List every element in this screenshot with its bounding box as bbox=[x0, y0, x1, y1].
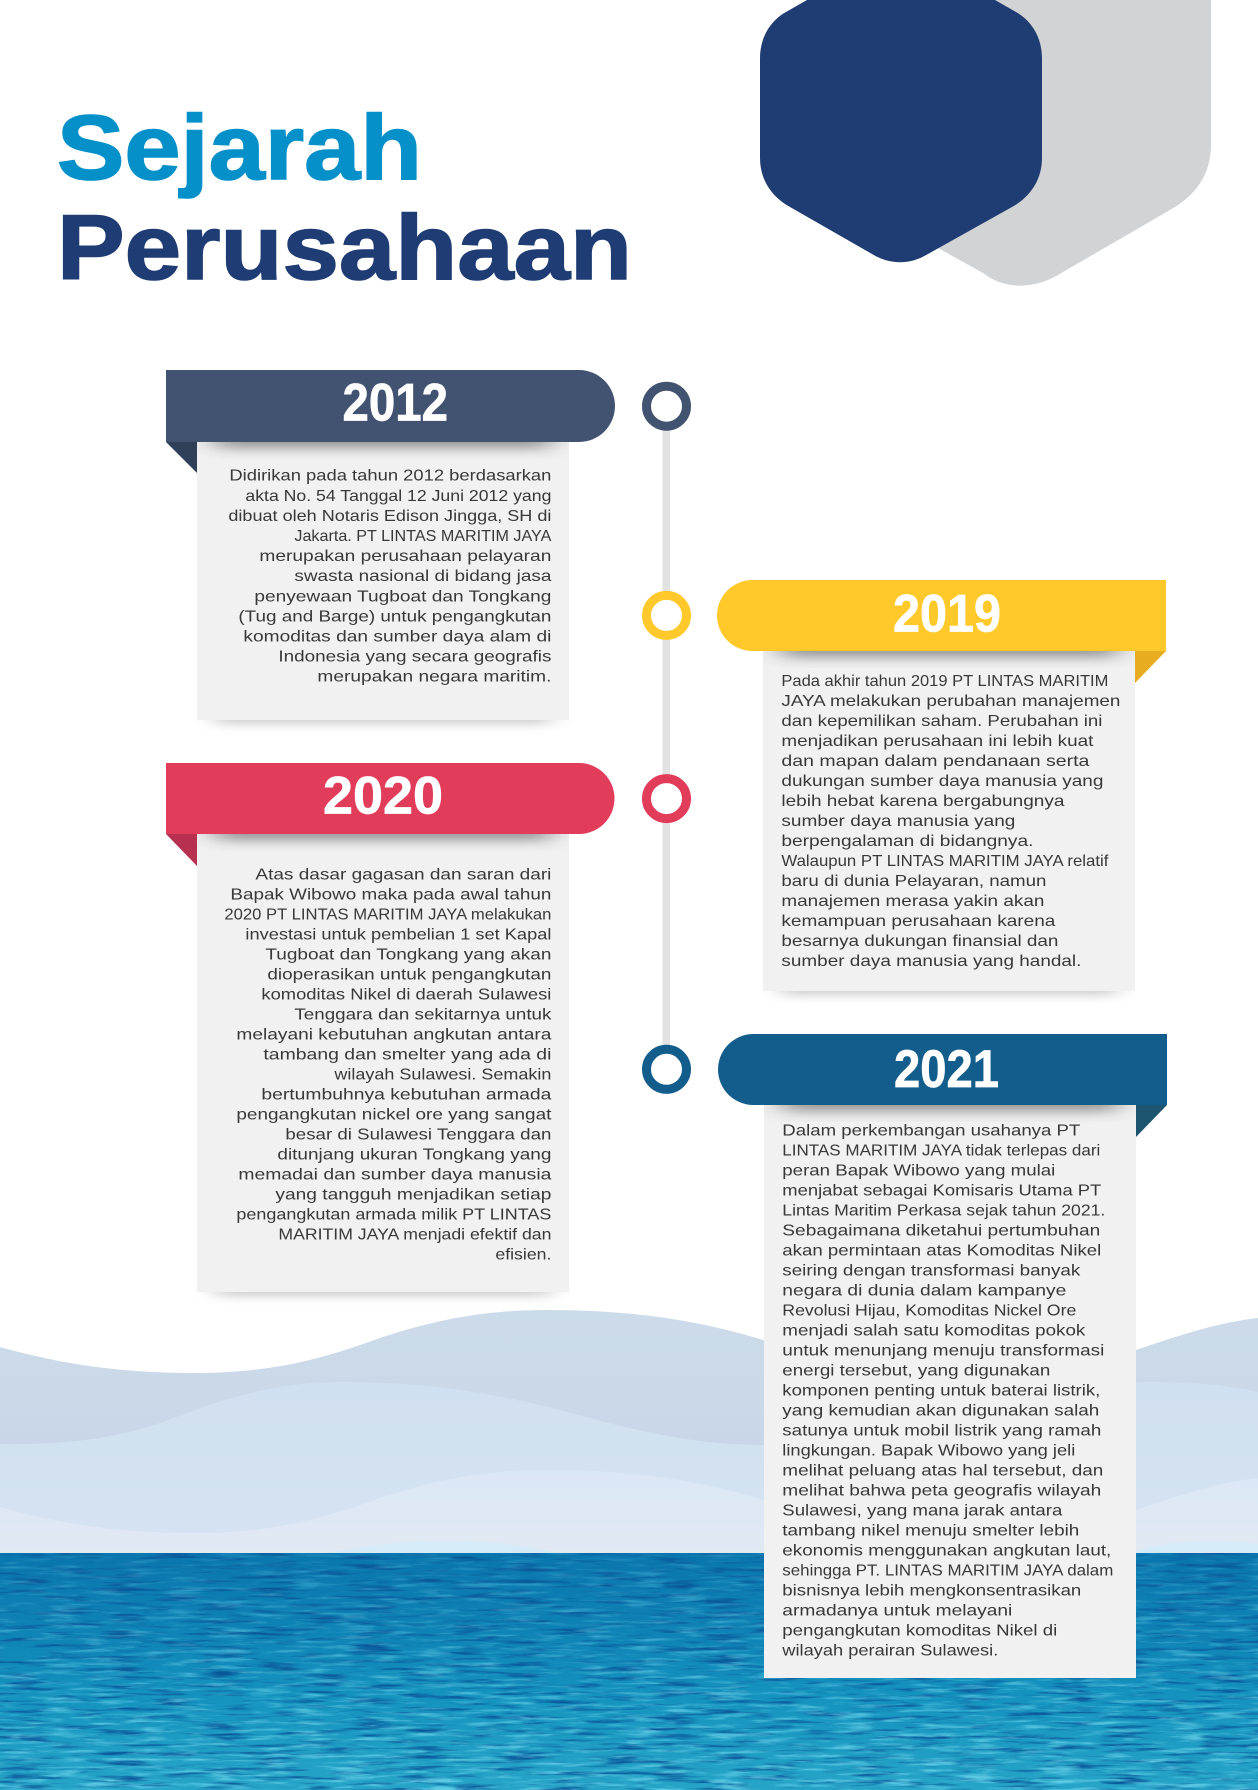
text 2020: Atas dasar gagasan dan saran dari bbox=[255, 867, 551, 884]
text 2012: merupakan negara maritim. bbox=[317, 669, 551, 686]
sea photo texture bbox=[0, 1553, 1258, 1790]
text 2021: Lintas Maritim Perkasa sejak tahun 2021. bbox=[782, 1203, 1105, 1220]
text 2020: memadai dan sumber daya manusia bbox=[238, 1167, 552, 1184]
text 2019: besarnya dukungan finansial dan bbox=[781, 933, 1058, 950]
banner 2012: 2012 bbox=[342, 374, 448, 433]
text 2012: Didirikan pada tahun 2012 berdasarkan bbox=[229, 468, 551, 485]
text 2021: Sebagaimana diketahui pertumbuhan bbox=[782, 1223, 1100, 1240]
text 2012: swasta nasional di bidang jasa bbox=[294, 568, 552, 585]
text 2021: wilayah perairan Sulawesi. bbox=[781, 1643, 998, 1660]
text 2019: Walaupun PT LINTAS MARITIM JAYA relatif bbox=[781, 853, 1109, 870]
text 2021: satunya untuk mobil listrik yang ramah bbox=[782, 1423, 1101, 1440]
text 2021: menjabat sebagai Komisaris Utama PT bbox=[782, 1183, 1102, 1200]
text 2021: Sulawesi, yang mana jarak antara bbox=[782, 1503, 1062, 1520]
banner 2012 bbox=[166, 370, 615, 442]
text 2020: pengangkutan nickel ore yang sangat bbox=[236, 1107, 552, 1124]
text 2012: Jakarta. PT LINTAS MARITIM JAYA bbox=[294, 528, 552, 545]
text 2020: wilayah Sulawesi. Semakin bbox=[333, 1067, 551, 1084]
text 2020: besar di Sulawesi Tenggara dan bbox=[285, 1127, 551, 1144]
text 2020: MARITIM JAYA menjadi efektif dan bbox=[278, 1227, 551, 1244]
banner 2021: 2021 bbox=[894, 1040, 999, 1099]
text 2020: ditunjang ukuran Tongkang yang bbox=[277, 1147, 551, 1164]
panel: 2012 bbox=[166, 370, 615, 724]
text 2020: investasi untuk pembelian 1 set Kapal bbox=[245, 927, 551, 944]
background waves bbox=[0, 1310, 1258, 1560]
title line 1: Sejarah bbox=[57, 97, 422, 199]
text 2019: dan kepemilikan saham. Perubahan ini bbox=[781, 713, 1102, 730]
text 2019: berpengalaman di bidangnya. bbox=[781, 833, 1033, 850]
timeline spine bbox=[662, 406, 670, 1069]
text 2012: komoditas dan sumber daya alam di bbox=[243, 628, 551, 646]
text 2020: 2020 PT LINTAS MARITIM JAYA melakukan bbox=[224, 907, 551, 924]
text 2021: negara di dunia dalam kampanye bbox=[782, 1283, 1066, 1300]
text 2019: dukungan sumber daya manusia yang bbox=[781, 773, 1103, 790]
text 2021: seiring dengan transformasi banyak bbox=[782, 1263, 1081, 1280]
text 2021: ekonomis menggunakan angkutan laut, bbox=[782, 1543, 1111, 1560]
text 2020: efisien. bbox=[495, 1247, 551, 1264]
text 2021: melihat bahwa peta geografis wilayah bbox=[782, 1483, 1101, 1500]
text 2019: kemampuan perusahaan karena bbox=[781, 913, 1056, 930]
decorative navy hexagon bbox=[760, 0, 1042, 262]
text 2019: baru di dunia Pelayaran, namun bbox=[781, 873, 1046, 890]
text 2021: LINTAS MARITIM JAYA tidak terlepas dari bbox=[782, 1143, 1100, 1160]
text 2020: pengangkutan armada milik PT LINTAS bbox=[236, 1207, 551, 1224]
text 2020: Bapak Wibowo maka pada awal tahun bbox=[230, 887, 551, 904]
panel: 2019 bbox=[717, 580, 1166, 995]
text 2020: Tenggara dan sekitarnya untuk bbox=[294, 1007, 553, 1024]
ribbon fold 2020 bbox=[166, 834, 197, 866]
text 2021: pengangkutan komoditas Nikel di bbox=[782, 1623, 1057, 1640]
marker 2021 bbox=[646, 1049, 686, 1089]
ribbon fold 2019 bbox=[1135, 651, 1166, 683]
text 2012: dibuat oleh Notaris Edison Jingga, SH di bbox=[228, 508, 551, 525]
marker 2012 bbox=[646, 386, 686, 426]
ribbon fold 2012 bbox=[166, 442, 197, 473]
text 2021: sehingga PT. LINTAS MARITIM JAYA dalam bbox=[782, 1563, 1113, 1580]
text 2019: sumber daya manusia yang handal. bbox=[781, 953, 1081, 970]
text 2021: peran Bapak Wibowo yang mulai bbox=[782, 1163, 1055, 1180]
text 2021: Dalam perkembangan usahanya PT bbox=[782, 1123, 1081, 1140]
text 2019 bbox=[781, 673, 1120, 970]
text 2020 bbox=[224, 867, 553, 1264]
text 2021: tambang nikel menuju smelter lebih bbox=[782, 1523, 1079, 1540]
text 2021: menjadi salah satu komoditas pokok bbox=[782, 1323, 1086, 1340]
text 2012 bbox=[228, 468, 552, 686]
text 2019: JAYA melakukan perubahan manajemen bbox=[781, 693, 1120, 710]
title line 2: Perusahaan bbox=[57, 197, 632, 299]
text 2021 bbox=[781, 1123, 1113, 1660]
text 2012: akta No. 54 Tanggal 12 Juni 2012 yang bbox=[245, 488, 551, 505]
text 2012: penyewaan Tugboat dan Tongkang bbox=[254, 588, 551, 605]
banner 2020: 2020 bbox=[323, 766, 443, 825]
text 2021: komponen penting untuk baterai listrik, bbox=[782, 1383, 1100, 1400]
text 2021: bisnisnya lebih mengkonsentrasikan bbox=[782, 1583, 1081, 1600]
text 2020: yang tangguh menjadikan setiap bbox=[275, 1187, 552, 1204]
marker 2020 bbox=[646, 779, 686, 819]
text 2021: lingkungan. Bapak Wibowo yang jeli bbox=[782, 1443, 1075, 1460]
text 2012: merupakan perusahaan pelayaran bbox=[259, 548, 551, 565]
text 2020: tambang dan smelter yang ada di bbox=[263, 1047, 551, 1064]
ribbon fold 2021 bbox=[1136, 1105, 1167, 1137]
text 2021: Revolusi Hijau, Komoditas Nickel Ore bbox=[782, 1303, 1076, 1320]
text 2020: Tugboat dan Tongkang yang akan bbox=[265, 947, 551, 964]
panel: 2020 bbox=[166, 763, 614, 1296]
text 2021: armadanya untuk melayani bbox=[782, 1603, 1012, 1620]
text 2019: manajemen merasa yakin akan bbox=[781, 893, 1044, 910]
banner 2021 bbox=[718, 1034, 1167, 1105]
text 2012: (Tug and Barge) untuk pengangkutan bbox=[238, 608, 551, 625]
banner 2020 bbox=[166, 763, 614, 834]
text 2021: energi tersebut, yang digunakan bbox=[782, 1363, 1050, 1380]
text 2020: komoditas Nikel di daerah Sulawesi bbox=[261, 987, 551, 1004]
text 2012: Indonesia yang secara geografis bbox=[278, 649, 551, 666]
marker 2019 bbox=[646, 595, 686, 635]
decorative gray hexagon bbox=[900, 0, 1211, 286]
text 2020: melayani kebutuhan angkutan antara bbox=[236, 1027, 552, 1044]
text 2021: akan permintaan atas Komoditas Nikel bbox=[782, 1243, 1101, 1260]
text 2019: sumber daya manusia yang bbox=[781, 813, 1015, 830]
text 2020: bertumbuhnya kebutuhan armada bbox=[261, 1087, 552, 1104]
text 2019: menjadikan perusahaan ini lebih kuat bbox=[781, 733, 1094, 750]
text 2019: Pada akhir tahun 2019 PT LINTAS MARITIM bbox=[781, 673, 1108, 690]
text 2021: untuk menunjang menuju transformasi bbox=[782, 1343, 1104, 1360]
text 2021: melihat peluang atas hal tersebut, dan bbox=[782, 1463, 1103, 1480]
text 2020: dioperasikan untuk pengangkutan bbox=[267, 967, 551, 984]
title bbox=[57, 97, 632, 299]
banner 2019: 2019 bbox=[893, 584, 1001, 643]
panel: 2021 bbox=[718, 1034, 1167, 1678]
text 2019: dan mapan dalam pendanaan serta bbox=[781, 753, 1090, 770]
text 2019: lebih hebat karena bergabungnya bbox=[781, 793, 1065, 810]
text 2021: yang kemudian akan digunakan salah bbox=[782, 1403, 1099, 1420]
banner 2019 bbox=[717, 580, 1166, 651]
